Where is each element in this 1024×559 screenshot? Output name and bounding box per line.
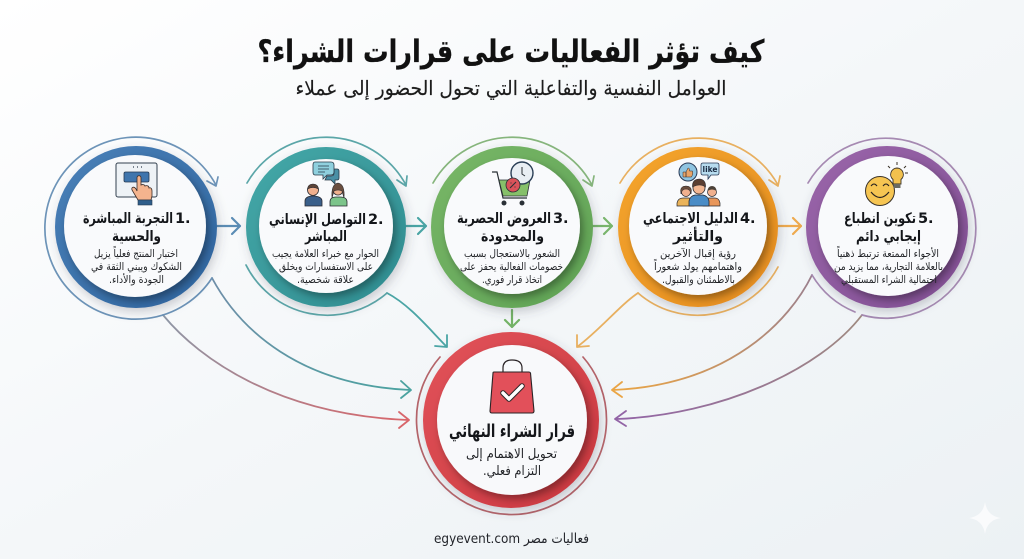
- heading: step 2: .: [378, 212, 384, 228]
- arrow: step 4 to step 5: [778, 218, 801, 234]
- connector: step 2 to final decision: [387, 293, 447, 347]
- body: step 5: بالعلامة التجارية، مما يزيد من: [834, 261, 943, 273]
- icon: two people talking: [305, 162, 347, 206]
- body: step 1: اختبار المنتج فعلياً يزيل: [94, 246, 178, 260]
- heading: step 5: إيجابي دائم: [856, 229, 921, 245]
- body: step 4: بالاطمئنان والقبول.: [662, 274, 735, 286]
- icon: social proof: [677, 163, 720, 206]
- heading: step 4: والتأثير: [672, 227, 723, 245]
- panel: step 5: [806, 138, 976, 318]
- arc: final decision: [417, 357, 607, 515]
- body: step 4: [654, 247, 742, 286]
- heading: step 3: 3: [553, 211, 563, 227]
- arc: step 3: [433, 137, 594, 186]
- body: step 1: الشكوك ويبني الثقة في: [91, 261, 182, 273]
- body: step 2: على الاستفسارات ويخلق: [279, 261, 373, 273]
- connector: step 5 to final decision (lower): [615, 315, 862, 426]
- arcs: step 4: [620, 138, 780, 315]
- heading: step 5: [844, 211, 934, 245]
- body: step 1: [91, 246, 182, 286]
- arcs: step 5: [808, 138, 976, 318]
- icon: touch panel: [116, 163, 157, 205]
- arc: step 1: [45, 137, 218, 319]
- ring: step 5: [806, 146, 968, 308]
- heading: step 2: [269, 212, 384, 245]
- inner disc: step 5: [818, 156, 958, 296]
- heading: step 1: والحسية: [112, 229, 161, 245]
- inner disc: step 4: [629, 157, 767, 295]
- connector: step 1 to final decision (lower): [163, 315, 409, 428]
- heading: step 3: [457, 211, 569, 245]
- heading: step 5: 5: [918, 211, 928, 227]
- body: step 2: الحوار مع خبراء العلامة يجيب: [272, 248, 379, 260]
- body: step 1: الجودة والأداء.: [109, 273, 164, 286]
- body: step 5: احتمالية الشراء المستقبلي: [841, 274, 937, 286]
- panel: step 4: [618, 138, 780, 315]
- title: كيف تؤثر الفعاليات على قرارات الشراء؟: [258, 34, 765, 70]
- body: step 4: رؤية إقبال الآخرين: [660, 247, 736, 260]
- heading: step 1: [83, 211, 191, 245]
- subtitle: العوامل النفسية والتفاعلية التي تحول الحضور إلى عملاء: [296, 76, 726, 101]
- body: step 5: [834, 246, 943, 286]
- body: step 5: الأجواء الممتعة ترتبط ذهنياً: [837, 246, 939, 260]
- panel: step 1: [45, 137, 218, 319]
- body: step 2: [272, 248, 379, 286]
- panel: step 3: [431, 137, 594, 308]
- ring: step 2: [246, 147, 406, 307]
- heading: step 4: الدليل الاجتماعي: [643, 211, 738, 227]
- body: step 3: اتخاذ قرار فوري.: [482, 274, 542, 286]
- ring: step 4: [618, 147, 778, 307]
- footer: source: فعاليات مصر egyevent.com: [434, 531, 589, 547]
- ring: final decision: [423, 332, 599, 508]
- icon: smiley with light bulb: [866, 162, 908, 206]
- heading: step 3: .: [563, 211, 569, 227]
- heading: step 3: العروض الحصرية: [457, 211, 551, 227]
- body: step 4: واهتمامهم يولد شعوراً: [654, 259, 742, 273]
- heading: step 2: المباشر: [304, 229, 347, 245]
- heading: step 2: 2: [368, 212, 378, 228]
- arrow: step 3 to step 4: [593, 218, 612, 234]
- connector: step 4 to final decision: [577, 293, 638, 347]
- icon: sparkle watermark: [969, 502, 1001, 534]
- body: step 3: خصومات الفعالية يحفز على: [460, 261, 563, 273]
- heading: step 1: .: [185, 211, 191, 227]
- inner disc: step 1: [64, 155, 206, 297]
- icon: social proof: like: [702, 165, 718, 174]
- arrow: step 1 to step 2: [217, 218, 240, 234]
- icon: shopping cart with clock and discount: [492, 162, 533, 206]
- heading: step 4: .: [750, 211, 756, 227]
- connector: step 3 to final decision: [505, 310, 519, 327]
- inner disc: step 2: [259, 159, 393, 293]
- heading: step 5: تكوين انطباع: [844, 211, 916, 227]
- connector: step 5 to final decision (upper): [612, 275, 812, 397]
- body: step 3: الشعور بالاستعجال بسبب: [464, 248, 560, 260]
- ring: step 3: [431, 146, 593, 308]
- connector: step 1 to final decision (upper): [212, 278, 411, 398]
- heading: step 3: والمحدودة: [481, 229, 544, 245]
- panel: final decision: [417, 332, 607, 515]
- icon: shopping bag with check: [490, 360, 534, 413]
- heading: step 2: التواصل الإنساني: [269, 212, 366, 228]
- inner disc: step 3: [444, 158, 580, 294]
- body: final decision: [466, 447, 557, 479]
- inner disc: final decision: [437, 345, 587, 495]
- panel: step 2: [246, 137, 407, 315]
- heading: step 1: 1: [175, 211, 185, 227]
- heading: step 1: التجربة المباشرة: [83, 211, 173, 227]
- arcs: step 2: [246, 137, 407, 315]
- body: final decision: تحويل الاهتمام إلى: [466, 447, 557, 462]
- heading: final decision: قرار الشراء النهائي: [449, 421, 575, 442]
- body: step 3: [460, 248, 563, 286]
- body: final decision: التزام فعلي.: [483, 464, 541, 479]
- arrow: step 2 to step 3: [406, 218, 426, 234]
- heading: step 5: .: [928, 211, 934, 227]
- ring: step 1: [55, 146, 217, 308]
- heading: step 4: [643, 211, 756, 245]
- body: step 2: علاقة شخصية.: [297, 274, 354, 286]
- heading: step 4: 4: [740, 211, 750, 227]
